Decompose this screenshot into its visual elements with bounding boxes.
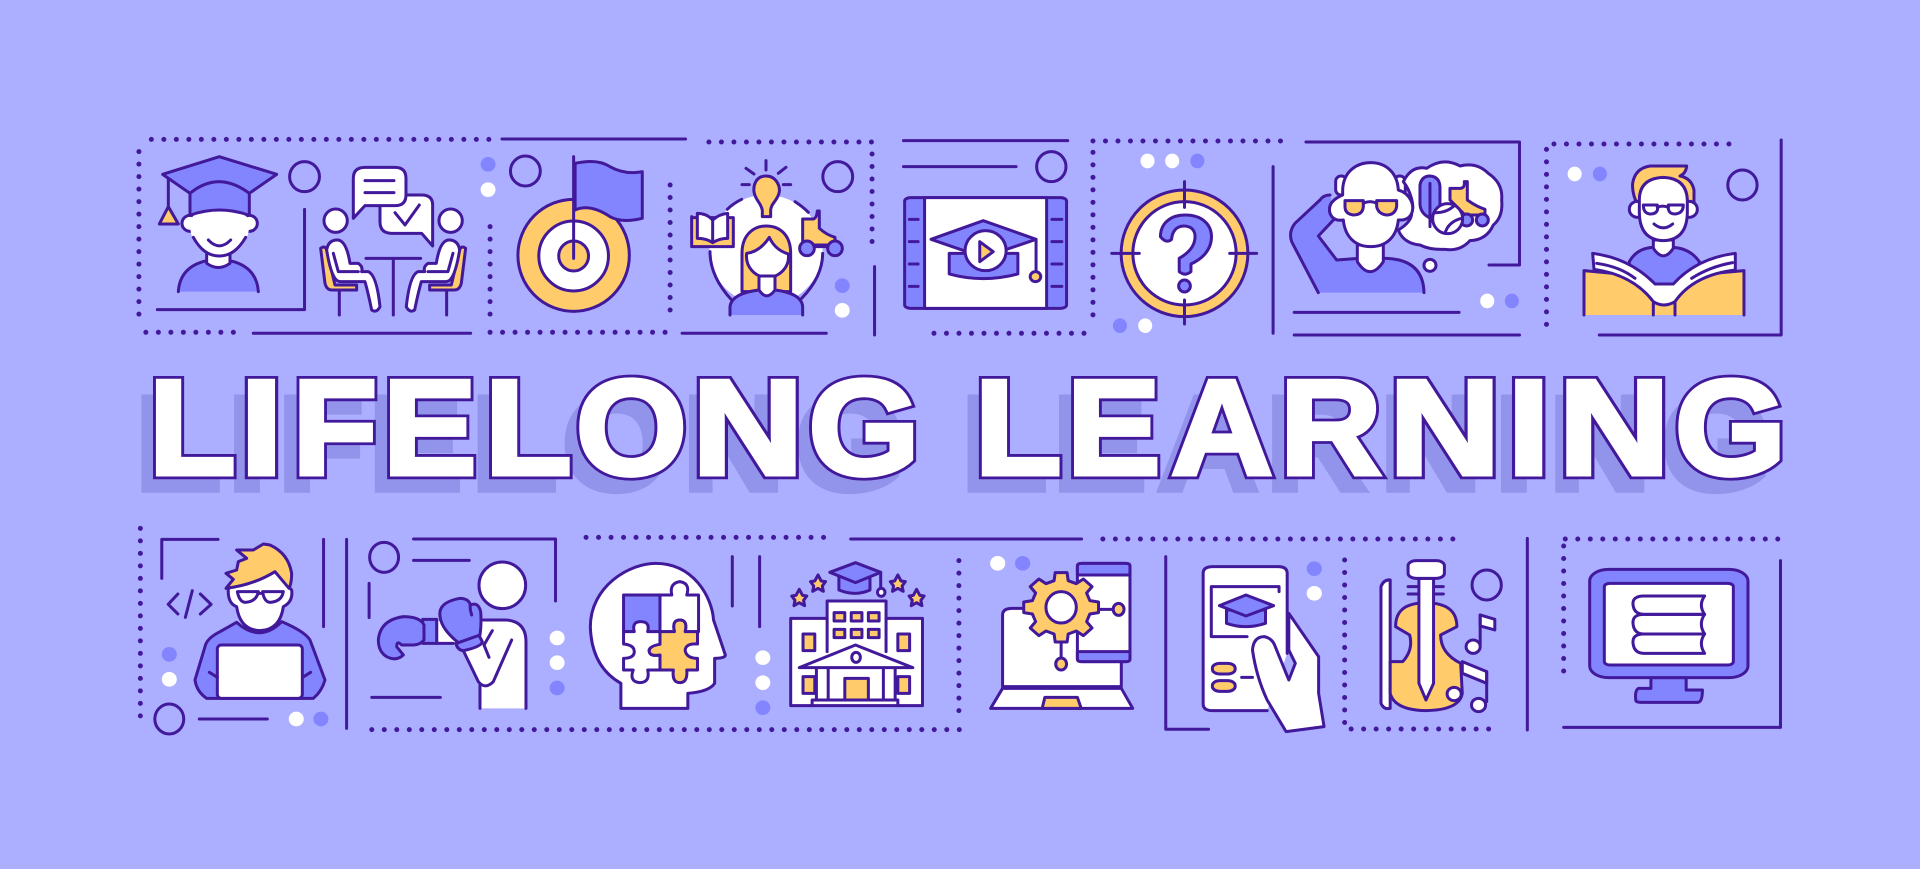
title fill: E <box>1067 352 1161 504</box>
icon: conversation at table <box>321 167 466 315</box>
title outline: L <box>975 352 1061 503</box>
icon: video lesson <box>905 198 1067 308</box>
icon: university building <box>791 563 924 706</box>
icon: man reading a book <box>1584 166 1744 315</box>
title fill: L <box>485 352 572 503</box>
title fill: N <box>692 352 803 503</box>
title outline: I <box>1508 351 1550 503</box>
title outline: O <box>576 353 687 503</box>
icon: violin with music notes <box>1381 561 1495 712</box>
title fill: N <box>1559 352 1670 503</box>
icon: head with puzzle <box>590 563 725 708</box>
icon: programmer with laptop <box>195 544 325 698</box>
icon: hand holding phone with course app <box>1203 567 1324 732</box>
title shadow: LEARNING <box>961 368 1772 519</box>
title outline: E <box>1067 352 1161 504</box>
icon: boxer <box>378 562 526 708</box>
title outline <box>149 351 1786 504</box>
title outline: N <box>1389 352 1500 503</box>
icon: code symbol <box>168 591 211 617</box>
title fill: I <box>240 351 283 503</box>
title fill: G <box>808 353 920 503</box>
title fill: F <box>292 353 377 504</box>
title fill: G <box>1675 353 1786 503</box>
icon: target with flag <box>518 157 642 311</box>
title fill: A <box>1171 353 1273 504</box>
icon: woman with ideas <box>692 161 842 315</box>
title outline: F <box>292 353 377 504</box>
title outline: N <box>692 352 803 503</box>
title outline: R <box>1280 352 1381 504</box>
title fill: E <box>383 352 477 504</box>
title shadow <box>135 368 1772 519</box>
icon: monitor with books <box>1590 569 1748 702</box>
title fill: I <box>1508 351 1550 503</box>
title fill: O <box>576 353 687 503</box>
title outline: L <box>485 352 572 503</box>
title fill: L <box>975 352 1061 503</box>
title fill: L <box>149 352 236 503</box>
title outline: I <box>240 351 283 503</box>
icon: elderly man thinking <box>1291 162 1502 293</box>
title fill: N <box>1389 352 1500 503</box>
icon: laptop and phone with gear <box>991 563 1133 708</box>
panel: bottom row right frame and icons <box>990 538 1782 732</box>
title <box>135 351 1786 519</box>
title fill <box>149 351 1786 504</box>
icon: question mark in crosshair <box>1112 182 1257 324</box>
title outline: G <box>1675 353 1786 503</box>
panel: top row left frame and target icon <box>139 139 875 335</box>
title outline: L <box>149 352 236 503</box>
panel: bottom row left frame with puzzle head and building icons <box>140 528 1082 734</box>
title shadow: LIFELONG <box>135 368 905 519</box>
title outline: G <box>808 353 920 503</box>
panel: top row right frame and video and question icons <box>903 140 1781 335</box>
icon: graduate <box>159 157 277 292</box>
title outline: A <box>1171 353 1273 504</box>
title outline: E <box>383 352 477 504</box>
title fill: R <box>1280 352 1381 504</box>
title outline: N <box>1559 352 1670 503</box>
